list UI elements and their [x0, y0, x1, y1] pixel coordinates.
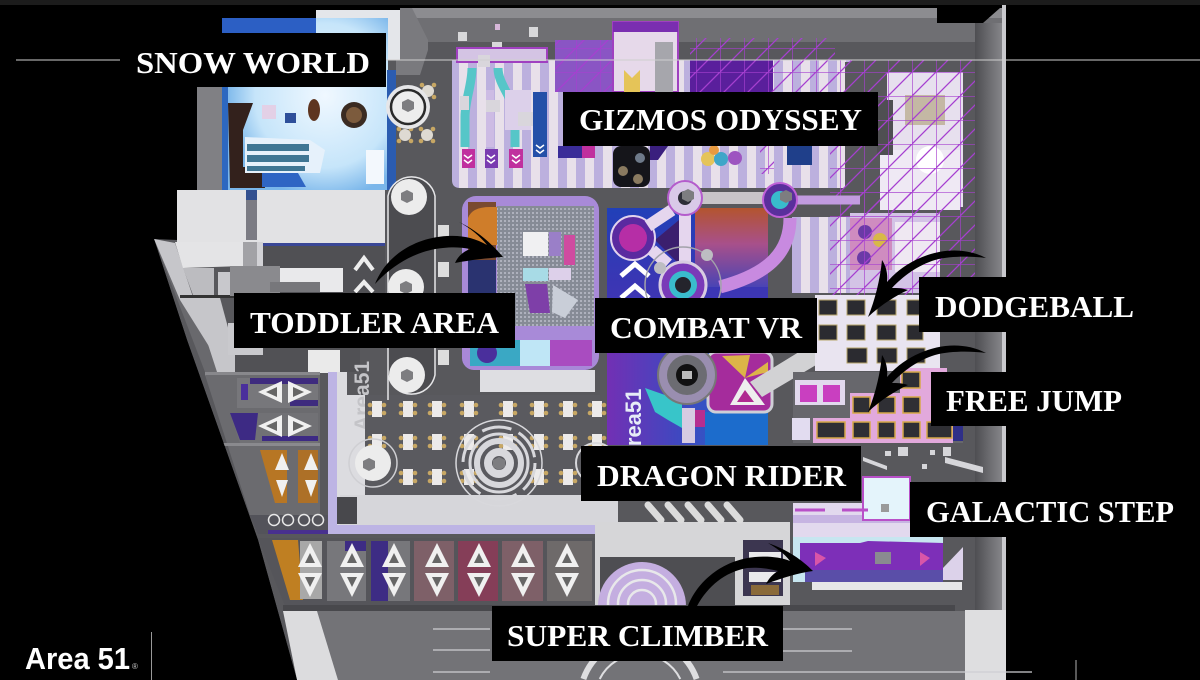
panel: left restrooms — [205, 375, 328, 534]
arrow: free jump — [868, 345, 986, 412]
left wing corridors — [154, 239, 385, 376]
label: dodgeball — [919, 277, 1150, 332]
seating pods track — [355, 177, 449, 400]
panel: dodgeball court — [815, 295, 940, 371]
ledge — [283, 605, 955, 611]
top right notch — [937, 8, 1000, 23]
label: snow world: SNOW WORLD — [136, 45, 370, 80]
purple tower — [613, 22, 678, 92]
label: super climber: SUPER CLIMBER — [507, 618, 769, 653]
top dark band — [0, 0, 1200, 5]
connector column — [682, 408, 705, 443]
label: super climber — [492, 606, 783, 661]
upper seating circle — [386, 83, 436, 143]
right wall band — [975, 23, 1002, 610]
logo: Area 51: Area 51 — [25, 641, 130, 676]
panel: gizmos odyssey playground — [452, 22, 850, 188]
label: combat vr — [595, 298, 817, 353]
logo: Area 51 — [25, 632, 152, 680]
label: toddler area — [234, 293, 515, 348]
panel: free jump — [792, 368, 963, 443]
white entry room — [316, 10, 400, 60]
lavender wall — [328, 372, 597, 534]
panel: toddler area — [462, 196, 599, 392]
panel: galactic step — [793, 477, 910, 537]
node 3 — [645, 247, 721, 323]
panel: snow world room — [197, 18, 396, 190]
left corner pier — [396, 8, 428, 75]
circle: dining rings — [456, 420, 542, 506]
panel: super climber wall — [793, 537, 963, 590]
label: gizmos odyssey: GIZMOS ODYSSEY — [579, 102, 862, 137]
label: dragon rider — [581, 446, 861, 501]
label: galactic step: GALACTIC STEP — [926, 494, 1174, 529]
label: gizmos odyssey — [563, 92, 878, 146]
node 1 — [668, 181, 702, 215]
arrow: super climber — [688, 543, 813, 606]
panel: bottom restrooms — [258, 538, 598, 606]
white service block — [177, 190, 385, 243]
label: dodgeball: DODGEBALL — [935, 289, 1134, 324]
chevron columns — [462, 92, 595, 168]
panel: white service block with circle — [580, 501, 790, 638]
hexagon tiles — [701, 145, 742, 166]
label: free jump — [931, 372, 1137, 426]
panel: right lattice structure — [792, 60, 975, 295]
panel: dining area — [349, 395, 616, 506]
label: toddler area: TODDLER AREA — [250, 305, 500, 340]
arrow: toddler area — [375, 222, 503, 284]
logo: Area 51: ® — [132, 662, 138, 671]
sunburst frame — [708, 352, 772, 412]
play structure connector — [685, 192, 780, 204]
parking lot — [283, 610, 1076, 680]
building shell — [154, 8, 1006, 680]
phone-shaped pit — [613, 146, 668, 187]
arrow: dodgeball — [868, 250, 986, 317]
label: snow world — [120, 33, 386, 87]
circle: left seating — [349, 439, 397, 487]
floor text: Area 51: Area51 — [351, 361, 374, 431]
label: dragon rider: DRAGON RIDER — [597, 458, 847, 493]
label: combat vr: COMBAT VR — [610, 310, 803, 345]
node circle — [611, 216, 655, 260]
floor text: Area51 — [621, 389, 646, 462]
black outside mask — [0, 239, 297, 680]
star burst — [645, 388, 682, 428]
building floor plan — [154, 5, 1076, 680]
upper corridor — [400, 18, 1002, 42]
panel: combat VR arena — [607, 181, 860, 462]
white triangle marker — [730, 378, 765, 405]
teal slides — [465, 68, 472, 147]
main ring — [658, 346, 716, 404]
label: galactic step — [910, 482, 1190, 537]
small ceiling cubes — [458, 24, 538, 51]
node 2 — [763, 183, 797, 217]
header rule — [16, 59, 1200, 61]
white blocks above corridor — [863, 447, 983, 473]
label: free jump: FREE JUMP — [946, 383, 1122, 418]
